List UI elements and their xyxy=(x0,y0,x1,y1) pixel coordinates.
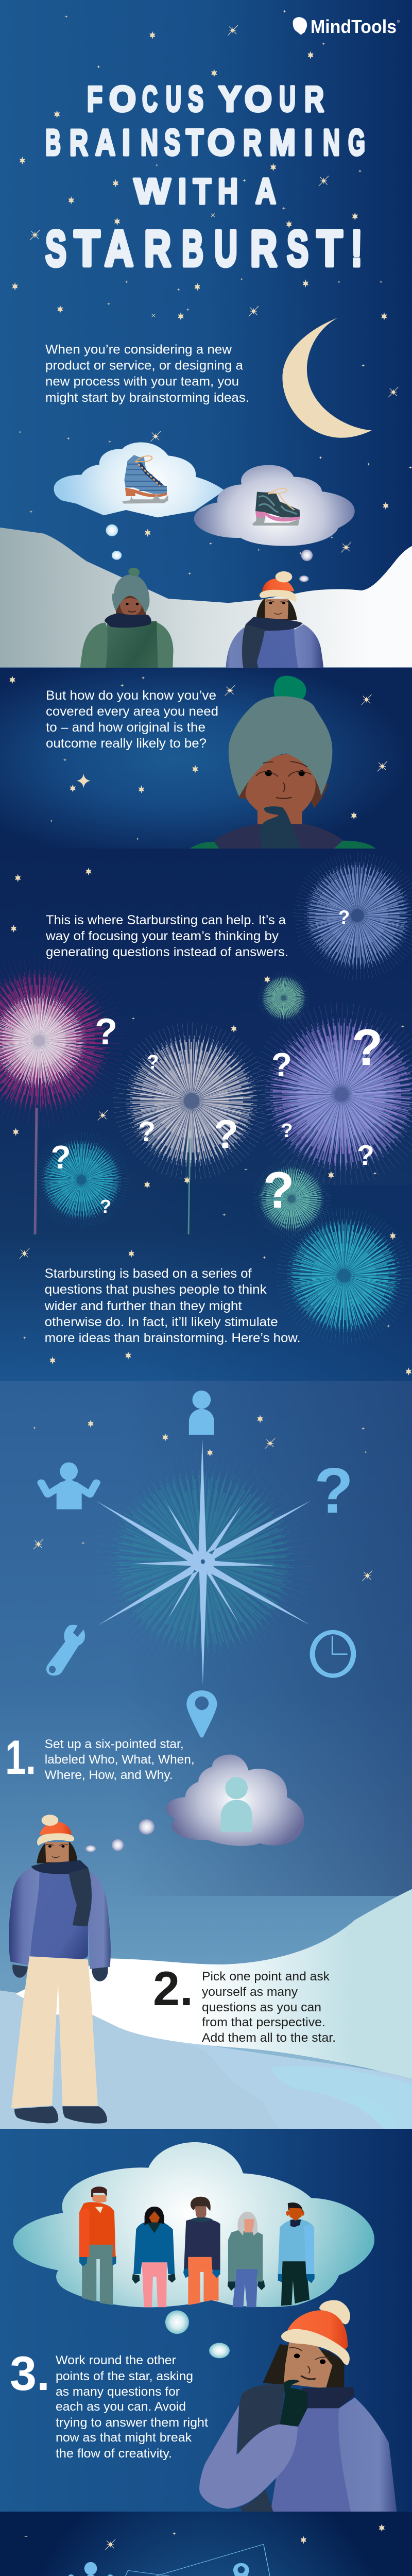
diagram: six-pointed starburst xyxy=(96,1438,311,1685)
icon: map pin xyxy=(186,1690,217,1738)
logo: MindTools: ® xyxy=(397,20,400,24)
title: U xyxy=(214,220,237,277)
title: G xyxy=(348,123,365,163)
title: R xyxy=(250,220,277,277)
character: blue skater full xyxy=(9,1815,111,2124)
question marks: ? xyxy=(357,1139,374,1171)
title: N xyxy=(323,123,340,163)
text: starbursting is based: wider and further than they might xyxy=(44,1299,242,1313)
text: this is where xyxy=(45,913,288,959)
title: R xyxy=(243,123,262,163)
title: T xyxy=(317,220,342,277)
text: this is where: generating questions instead of answers. xyxy=(46,945,288,959)
panel: how do you know xyxy=(0,668,412,849)
icon: clock xyxy=(313,1632,353,1675)
title: Y xyxy=(218,79,242,119)
title: S xyxy=(164,123,180,163)
question marks: ? xyxy=(214,1111,238,1157)
question marks: ? xyxy=(95,1011,117,1053)
title: T xyxy=(186,123,203,163)
star field: intro xyxy=(18,364,412,575)
thought cloud: team of five xyxy=(13,2142,397,2512)
title: I xyxy=(122,123,130,163)
title: W xyxy=(134,171,170,211)
step 3 text: the flow of creativity. xyxy=(56,2447,172,2461)
fireworks xyxy=(0,863,412,1331)
character: thinking woman xyxy=(199,2300,397,2512)
step 3 text xyxy=(56,2353,208,2461)
icon: question mark: ? xyxy=(314,1455,353,1527)
step 2 text: Pick one point and ask xyxy=(202,1970,330,1984)
step 1 text: Where, How, and Why. xyxy=(45,1768,173,1782)
title: O xyxy=(245,79,272,119)
person: blue coat xyxy=(132,2207,176,2307)
step 2 text: from that perspective. xyxy=(202,2015,325,2029)
title: B xyxy=(45,123,61,163)
illustration: thinking man xyxy=(189,676,376,849)
title: ! xyxy=(351,220,363,277)
text: how do you know xyxy=(46,688,218,751)
title: S xyxy=(287,220,308,277)
title: U xyxy=(166,79,181,119)
title: T xyxy=(74,220,100,277)
thought cloud: blue skate xyxy=(54,442,225,517)
question marks: ? xyxy=(138,1115,156,1147)
question marks: ? xyxy=(100,1196,111,1217)
thought bubbles xyxy=(165,2311,230,2358)
title: O xyxy=(109,79,136,119)
title: C xyxy=(142,79,158,119)
thought cloud: person xyxy=(85,1754,304,1852)
icon: shrugging person xyxy=(71,2562,110,2576)
title: I xyxy=(304,123,313,163)
title: S xyxy=(188,79,203,119)
text: how do you know: But how do you know you’ve xyxy=(46,688,216,703)
title: R xyxy=(144,220,171,277)
intro text: new process with your team, you xyxy=(45,375,239,389)
step 2 number: 2. xyxy=(153,1961,193,2015)
text: how do you know: to – and how original is the xyxy=(46,720,205,735)
character: green skater bust xyxy=(79,568,199,871)
text: starbursting is based: Starbursting is based on a series of xyxy=(45,1266,252,1281)
panel: steps 1 and 2 xyxy=(0,1381,412,2129)
step 3 text: each as you can. Avoid xyxy=(56,2400,186,2414)
person: curly hair xyxy=(183,2197,220,2305)
text: starbursting is based: more ideas than brainstorming. Here’s how. xyxy=(45,1331,301,1345)
step 2 text: yourself as many xyxy=(202,1985,298,1999)
diagram: connected icons xyxy=(59,2544,327,2576)
panel: fireworks xyxy=(0,849,412,1381)
title: R xyxy=(70,123,88,163)
icon: person xyxy=(189,1391,214,1435)
question marks xyxy=(50,907,383,1218)
question marks: ? xyxy=(281,1120,293,1142)
step 2 text: Add them all to the star. xyxy=(202,2031,336,2045)
title: A xyxy=(255,171,276,211)
text: how do you know: outcome really likely to be? xyxy=(46,736,207,751)
step 3 text: points of the star, asking xyxy=(56,2369,193,2383)
star field: header xyxy=(12,10,387,320)
step 2 text xyxy=(202,1970,336,2045)
star field: diagram xyxy=(32,1415,372,1581)
person: red jacket xyxy=(79,2187,116,2305)
question marks: ? xyxy=(147,1052,159,1073)
panel: step 4 xyxy=(0,2512,412,2576)
question marks: ? xyxy=(352,1019,383,1076)
logo: MindTools: MindTools xyxy=(311,16,397,37)
question marks: ? xyxy=(50,1139,71,1176)
icon: map pin xyxy=(233,2563,249,2576)
title xyxy=(45,79,365,277)
icon: crescent moon xyxy=(282,318,372,438)
person: grey hair xyxy=(228,2212,265,2307)
title: S xyxy=(45,220,66,277)
intro text: might start by brainstorming ideas. xyxy=(45,391,249,405)
text: this is where: This is where Starbursting can help. It’s a xyxy=(46,913,286,927)
title: A xyxy=(105,220,133,277)
star field: panel 2 xyxy=(9,676,387,840)
thought cloud: dark skate xyxy=(194,465,355,546)
intro text: product or service, or designing a xyxy=(45,359,243,373)
title: I xyxy=(178,171,186,211)
text: starbursting is based: questions that pushes people to think xyxy=(45,1282,267,1297)
intro text xyxy=(45,342,249,405)
firework stems xyxy=(35,1108,190,1234)
question marks: ? xyxy=(263,1161,294,1218)
step 1 number: 1. xyxy=(5,1730,36,1784)
panel: intro xyxy=(0,0,412,880)
character: blue skater bust xyxy=(223,571,325,880)
title: O xyxy=(208,123,235,163)
step 3 number: 3. xyxy=(10,2346,50,2400)
star field: connections xyxy=(7,2524,404,2576)
title: H xyxy=(218,171,238,211)
icon: shrugging person xyxy=(41,1462,96,1510)
title: N xyxy=(141,123,158,163)
step 3 text: as many questions for xyxy=(56,2385,180,2399)
title: M xyxy=(269,123,296,163)
thought bubbles xyxy=(106,524,313,582)
snow hills xyxy=(0,528,412,667)
connection lines xyxy=(59,2544,327,2576)
title: A xyxy=(95,123,115,163)
snow hill xyxy=(16,1889,412,2079)
title: U xyxy=(279,79,296,119)
title: B xyxy=(182,220,203,277)
scene: moon, thought clouds and two skaters xyxy=(0,318,412,667)
question marks: ? xyxy=(338,907,350,928)
title: R xyxy=(304,79,324,119)
person: light blue coat xyxy=(278,2202,315,2306)
icons: who what when where how why xyxy=(41,1391,353,1738)
text: this is where: way of focusing your team’s thinking by xyxy=(45,929,279,943)
intro text: When you’re considering a new xyxy=(45,342,232,357)
step 3 text: Work round the other xyxy=(56,2353,176,2367)
step 3 text: now as that might break xyxy=(56,2431,192,2445)
question marks: ? xyxy=(271,1046,292,1083)
text: how do you know: covered every area you need xyxy=(46,704,218,719)
panel: step 3 xyxy=(0,2129,412,2512)
step 1 text: Set up a six-pointed star, xyxy=(45,1737,184,1751)
icon: wrench xyxy=(46,1625,85,1675)
star field: fireworks xyxy=(11,868,411,1376)
ice xyxy=(0,1889,412,2129)
title: T xyxy=(193,171,211,211)
text: starbursting is based: otherwise do. In fact, it’ll likely stimulate xyxy=(45,1315,278,1329)
step 2 text: questions as you can xyxy=(202,2001,321,2014)
text: starbursting is based xyxy=(44,1266,301,1345)
step 3 text: trying to answer them right xyxy=(56,2416,208,2430)
title: F xyxy=(87,79,102,119)
step 1 text xyxy=(45,1737,195,1782)
step 1 text: labeled Who, What, When, xyxy=(45,1753,195,1767)
